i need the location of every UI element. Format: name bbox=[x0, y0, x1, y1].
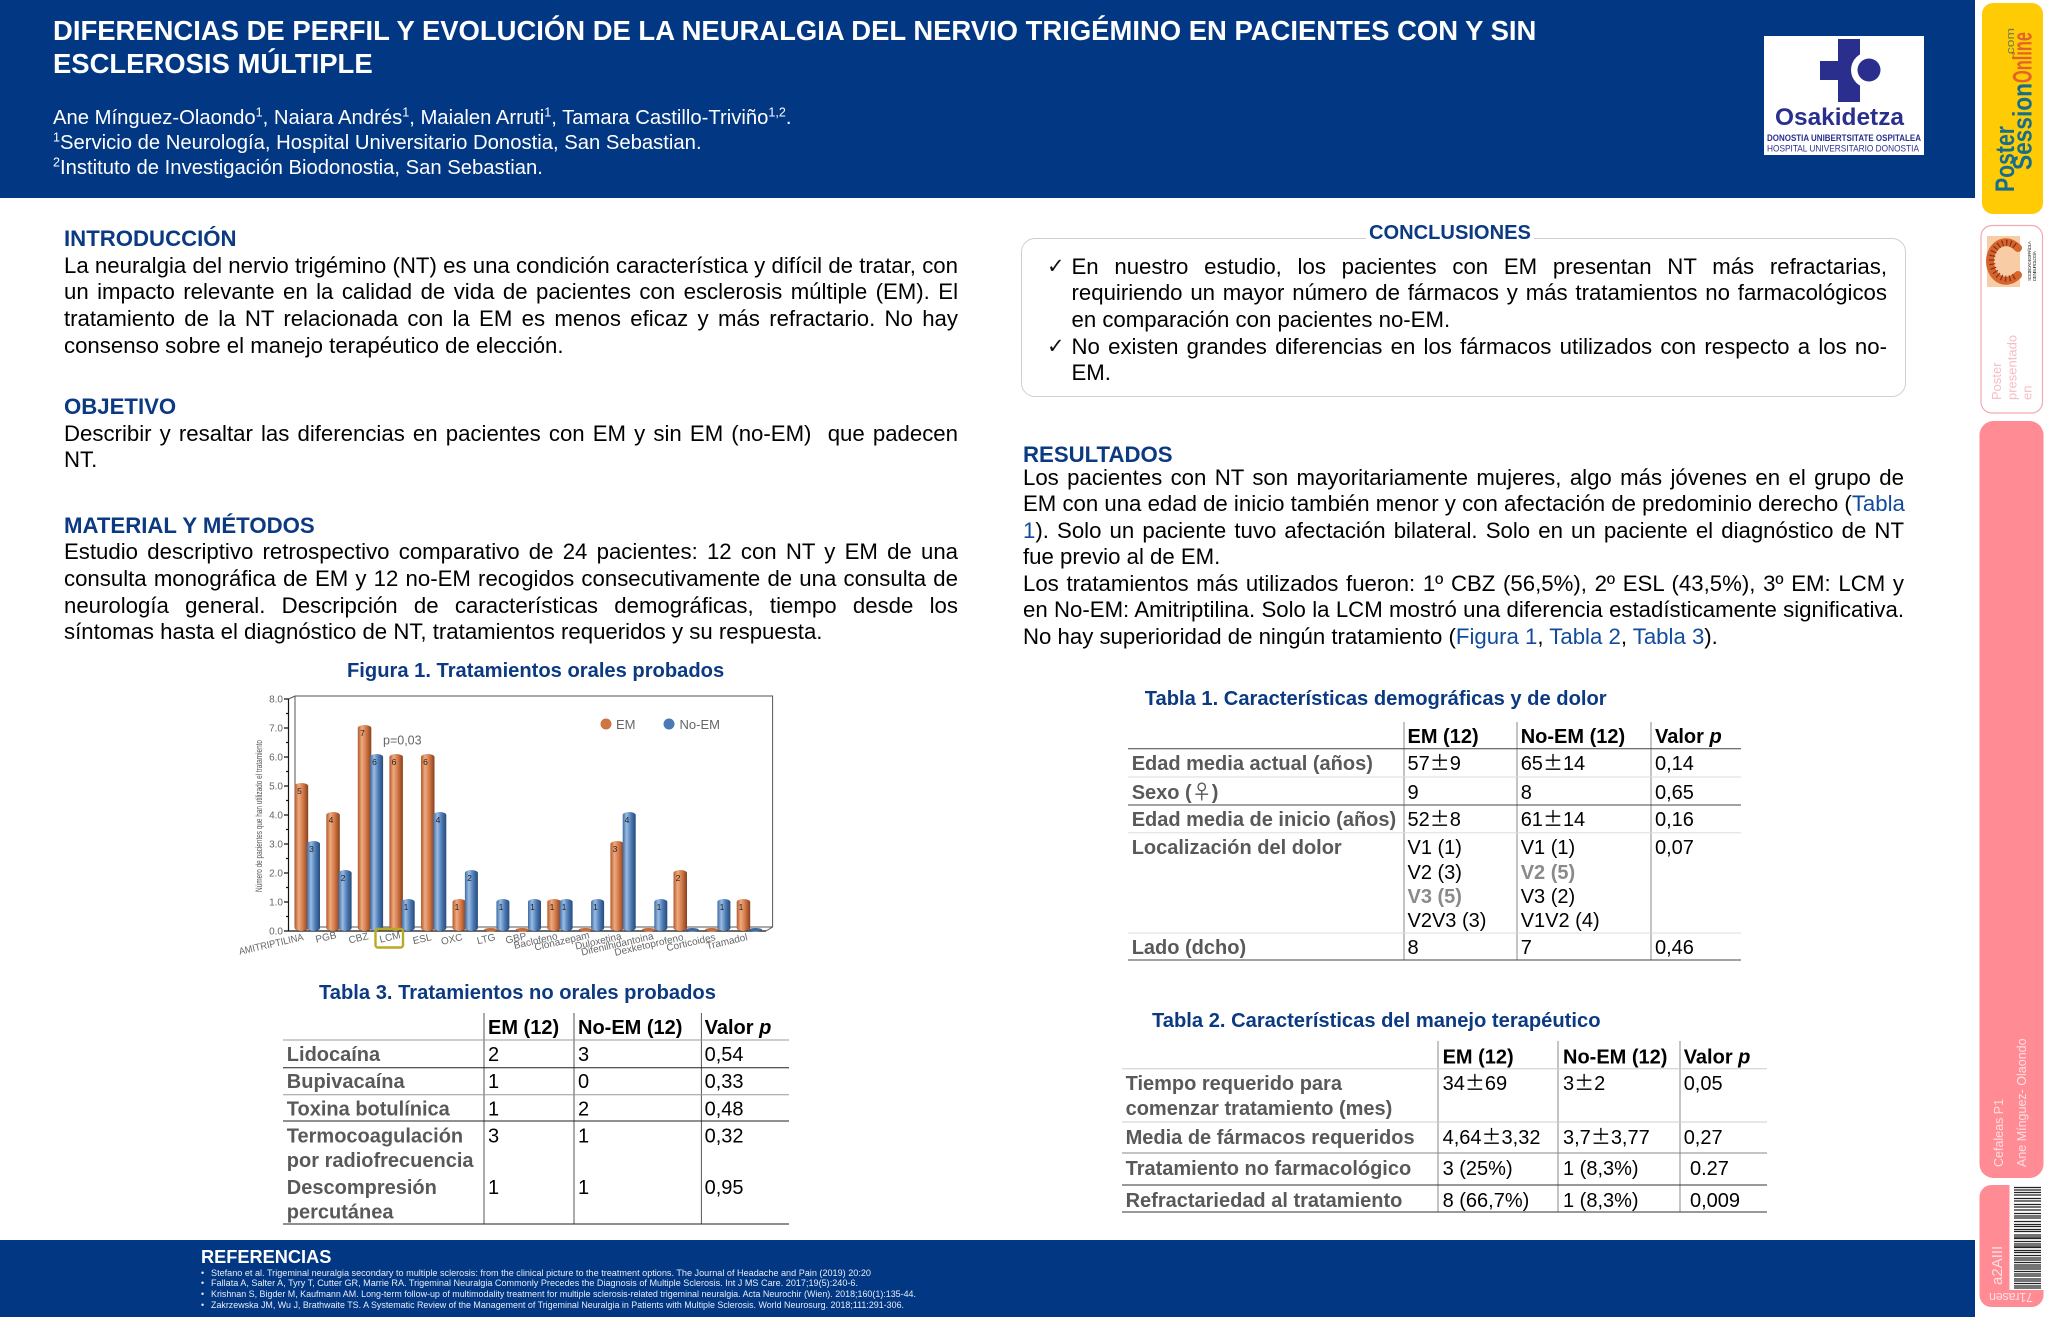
table 1: características demográficas y de dolor: V1 (1) bbox=[1521, 837, 1575, 859]
barcode bbox=[2014, 1188, 2041, 1288]
table 1: características demográficas y de dolor: Lado (dcho) bbox=[1132, 937, 1246, 959]
y axis labels: 8.0 bbox=[269, 694, 283, 706]
sidebar: session and author panel bbox=[1980, 421, 2044, 1178]
table 3: tratamientos no orales: 0,54 bbox=[705, 1044, 744, 1066]
caption: Tabla 1: Tabla 1. Características demográficas y de dolor bbox=[1145, 688, 1607, 710]
title: DIFERENCIAS DE PERFIL Y EVOLUCIÓN DE LA NEURALGIA DEL NERVIO TRIGÉMINO EN PACIENTES CON Y SIN bbox=[53, 15, 1536, 46]
sidebar: session and author panel: Cefaleas P1 bbox=[1992, 1099, 2006, 1167]
table 1: características demográficas y de dolor: Edad media actual (años) bbox=[1132, 753, 1373, 775]
table 1: características demográficas y de dolor: 0,07 bbox=[1655, 837, 1694, 859]
table 3: tratamientos no orales: 1 bbox=[578, 1126, 589, 1148]
table 2: manejo terapéutico: 3±2 bbox=[1563, 1067, 1605, 1096]
caption: Figura 1: Figura 1. Tratamientos orales probados bbox=[347, 660, 724, 682]
authors and affiliations: Ane Mínguez-Olaondo1, Naiara Andrés1, Maialen Arruti1, Tamara Castillo-Triviño1,2. bbox=[53, 105, 792, 128]
bar value labels: 1 bbox=[455, 902, 460, 912]
table 1: características demográficas y de dolor: 8 bbox=[1408, 937, 1419, 959]
table 2: manejo terapéutico: 4,64±3,32 bbox=[1443, 1121, 1540, 1150]
reference list: Fallata A, Salter A, Tyry T, Cutter GR, Marrie RA. Trigeminal Neuralgia Commonly Precedes the Diagnosis of Multiple Sclerosis. Int J MS Care. 2017;19(5):240-6. bbox=[211, 1278, 858, 1288]
x axis labels: Duloxetina bbox=[574, 931, 623, 953]
poster presented note: presentado bbox=[2005, 335, 2020, 400]
y axis title: Número de pacientes que han utilizado el tratamiento bbox=[254, 740, 265, 892]
bar value labels: 1 bbox=[720, 902, 725, 912]
table 3: tratamientos no orales: 0,32 bbox=[705, 1126, 744, 1148]
x axis labels: Tramadol bbox=[705, 932, 749, 952]
table 1: características demográficas y de dolor: 0,14 bbox=[1655, 753, 1694, 775]
emblem caption: SOCIEDAD ESPAÑOLA bbox=[2026, 240, 2033, 281]
bar value labels: 4 bbox=[436, 815, 441, 825]
heading: Material y métodos: MATERIAL Y MÉTODOS bbox=[64, 513, 315, 538]
x axis labels: GBP bbox=[505, 931, 528, 947]
table 3: tratamientos no orales: percutánea bbox=[287, 1202, 394, 1224]
table 3: tratamientos no orales: 1 bbox=[488, 1177, 499, 1199]
bar value labels: 2 bbox=[467, 873, 472, 883]
conclusions text: En nuestro estudio, los pacientes con EM presentan NT más refractarias, bbox=[1072, 254, 1887, 279]
conclusions text: en comparación con pacientes no-EM. bbox=[1072, 307, 1450, 332]
bar value labels: 2 bbox=[341, 873, 346, 883]
conclusions box outline bbox=[1021, 238, 1906, 397]
text: Resultados: 1). Solo un paciente tuvo afectación bilateral. Solo en un paciente el diagnóstico de NT bbox=[1023, 518, 1904, 543]
table 1: características demográficas y de dolor: 61±14 bbox=[1521, 803, 1585, 832]
table 2: manejo terapéutico bbox=[1122, 1041, 1767, 1212]
text: Resultados: Los pacientes con NT son mayoritariamente mujeres, algo más jóvenes en el grupo de bbox=[1023, 465, 1904, 490]
table 1: características demográficas y de dolor: 7 bbox=[1521, 937, 1532, 959]
table 2: manejo terapéutico: Valor p bbox=[1684, 1046, 1750, 1068]
header band bbox=[0, 0, 1975, 198]
sidebar: PosterSessionOnline logo: Online bbox=[2008, 32, 2038, 83]
table 2: manejo terapéutico: Refractariedad al tratamiento bbox=[1126, 1190, 1402, 1212]
y axis labels: 6.0 bbox=[269, 752, 283, 764]
table 1: características demográficas y de dolor: No-EM (12) bbox=[1521, 726, 1625, 748]
table 2: manejo terapéutico: 0,27 bbox=[1684, 1127, 1723, 1149]
table 3: tratamientos no orales: 2 bbox=[578, 1098, 589, 1120]
title bbox=[53, 15, 1536, 79]
table 1: características demográficas y de dolor: Valor p bbox=[1655, 726, 1722, 748]
conclusions text: requiriendo un mayor número de fármacos y más tratamientos no farmacológicos bbox=[1072, 280, 1887, 305]
x axis labels: Clonazepam bbox=[533, 930, 591, 954]
heading: Conclusiones: CONCLUSIONES bbox=[1369, 222, 1531, 244]
poster presented note: en bbox=[2020, 386, 2035, 400]
table 2: manejo terapéutico: Tiempo requerido para bbox=[1126, 1073, 1343, 1095]
table 2: manejo terapéutico: 3 (25%) bbox=[1443, 1158, 1513, 1180]
conclusions text: No existen grandes diferencias en los fármacos utilizados con respecto a los no- bbox=[1072, 334, 1887, 359]
table 1: características demográficas y de dolor: 8 bbox=[1521, 782, 1532, 804]
chart legend: No-EM bbox=[680, 717, 720, 732]
y axis labels: 4.0 bbox=[269, 810, 283, 822]
table 3: tratamientos no orales: 0 bbox=[578, 1071, 589, 1093]
x axis labels: Dexketoprofeno bbox=[613, 932, 685, 959]
bar value labels: 2 bbox=[676, 873, 681, 883]
y axis labels: 5.0 bbox=[269, 782, 283, 792]
sidebar: PosterSessionOnline logo: Poster bbox=[1990, 126, 2020, 192]
sidebar: PosterSessionOnline logo: Session bbox=[2008, 83, 2038, 170]
reference list bbox=[201, 1268, 916, 1310]
table 2: manejo terapéutico: 34±69 bbox=[1443, 1067, 1507, 1096]
table 2: manejo terapéutico: No-EM (12) bbox=[1563, 1046, 1667, 1068]
text: Introducción: tratamiento de la NT relacionada con la EM es menos eficaz y más refractario. No hay bbox=[64, 306, 958, 331]
table 2: manejo terapéutico: Tratamiento no farmacológico bbox=[1126, 1158, 1411, 1180]
reference list: • bbox=[201, 1268, 204, 1278]
bar value labels: 1 bbox=[657, 902, 662, 912]
text: Material y métodos: neurología general. Descripción de características demográficas, tiempo desde los bbox=[64, 593, 958, 618]
x axis labels: LCM bbox=[379, 930, 402, 946]
text: Objetivo: NT. bbox=[64, 447, 97, 472]
bars: EM and No-EM bbox=[295, 725, 762, 932]
table 2: manejo terapéutico: 0,009 bbox=[1690, 1190, 1740, 1212]
y axis labels bbox=[269, 694, 283, 938]
table 1: características demográficas y de dolor: Edad media de inicio (años) bbox=[1132, 809, 1396, 831]
bar value labels: 1 bbox=[550, 902, 555, 912]
table 1: características demográficas y de dolor: 0,65 bbox=[1655, 782, 1694, 804]
authors and affiliations bbox=[53, 105, 792, 178]
bar value labels: 1 bbox=[499, 902, 504, 912]
x axis labels: OXC bbox=[440, 932, 464, 948]
table 2: manejo terapéutico: 1 (8,3%) bbox=[1563, 1158, 1639, 1180]
text: Material y métodos: Estudio descriptivo retrospectivo comparativo de 24 pacientes: 12 con NT y EM de una bbox=[64, 539, 958, 564]
text: Introducción: La neuralgia del nervio trigémino (NT) es una condición característica y difícil de tratar, con bbox=[64, 253, 958, 278]
heading: Objetivo: OBJETIVO bbox=[64, 394, 176, 419]
table 3: tratamientos no orales: 0,95 bbox=[705, 1177, 744, 1199]
bar value labels: 6 bbox=[423, 757, 428, 767]
table 1: características demográficas y de dolor: 0,46 bbox=[1655, 937, 1694, 959]
y axis labels: 7.0 bbox=[269, 724, 283, 734]
reference list: Krishnan S, Bigder M, Kaufmann AM. Long-term follow-up of multimodality treatment for multiple sclerosis-related trigeminal neuralgia. Acta Neurochir (Wien). 2018;160(1):135-44. bbox=[211, 1289, 916, 1299]
table 1: características demográficas y de dolor: 65±14 bbox=[1521, 747, 1585, 776]
table 2: manejo terapéutico: 8 (66,7%) bbox=[1443, 1190, 1529, 1212]
table 3: tratamientos no orales: Termocoagulación bbox=[287, 1126, 463, 1148]
bar value labels: 3 bbox=[613, 844, 618, 854]
bar chart: tratamientos orales bbox=[238, 694, 773, 959]
heading: Resultados: RESULTADOS bbox=[1023, 442, 1173, 467]
y axis labels: 2.0 bbox=[269, 868, 283, 880]
text: Resultados: en No-EM: Amitriptilina. Solo la LCM mostró una diferencia estadísticamente significativa. bbox=[1023, 597, 1904, 622]
text: Resultados: fue previo al de EM. bbox=[1023, 544, 1220, 569]
logo: Osakidetza bbox=[1764, 36, 1924, 155]
table 3: tratamientos no orales: Toxina botulínica bbox=[287, 1098, 451, 1120]
x axis labels: Baclofeno bbox=[513, 931, 559, 952]
table 3: tratamientos no orales: Bupivacaína bbox=[287, 1071, 405, 1093]
text: Introducción bbox=[64, 253, 958, 358]
table 3: tratamientos no orales: 2 bbox=[488, 1044, 499, 1066]
table 3: tratamientos no orales: EM (12) bbox=[488, 1017, 559, 1039]
table 2: manejo terapéutico: EM (12) bbox=[1443, 1046, 1514, 1068]
text: Material y métodos bbox=[64, 539, 958, 644]
table 3: tratamientos no orales bbox=[283, 1013, 789, 1224]
table 1: características demográficas y de dolor: 52±8 bbox=[1408, 803, 1461, 832]
bar value labels: 4 bbox=[329, 815, 334, 825]
sidebar: poster code and barcode bbox=[1980, 1184, 2044, 1307]
bar value labels: 1 bbox=[593, 902, 598, 912]
conclusions text bbox=[1072, 254, 1887, 385]
caption: Tabla 2: Tabla 2. Características del manejo terapéutico bbox=[1152, 1010, 1600, 1032]
table 3: tratamientos no orales: 0,48 bbox=[705, 1098, 744, 1120]
table 3: tratamientos no orales: 0,33 bbox=[705, 1071, 744, 1093]
sidebar: poster code and barcode: a2AIII bbox=[1989, 1246, 2006, 1285]
title: ESCLEROSIS MÚLTIPLE bbox=[53, 48, 373, 79]
reference list: Stefano et al. Trigeminal neuralgia secondary to multiple sclerosis: from the clinical picture to the treatment options. The Journal of Headache and Pain (2019) 20:20 bbox=[211, 1268, 871, 1278]
table 3: tratamientos no orales: 1 bbox=[488, 1071, 499, 1093]
y axis labels: 1.0 bbox=[269, 898, 283, 908]
check marks: ✓ bbox=[1047, 334, 1065, 358]
text: Introducción: un impacto relevante en la calidad de vida de pacientes con esclerosis múltiple (EM). El bbox=[64, 279, 958, 304]
LCM highlight box bbox=[376, 929, 403, 948]
bar value labels: 1 bbox=[562, 902, 567, 912]
footer band: referencias bbox=[0, 1240, 1975, 1317]
table 3: tratamientos no orales: 1 bbox=[578, 1177, 589, 1199]
text: Material y métodos: síntomas hasta el diagnóstico de NT, tratamientos requeridos y su respuesta. bbox=[64, 619, 822, 644]
chart legend: EM bbox=[616, 717, 636, 732]
table 1: características demográficas y de dolor: V3 (5) bbox=[1408, 886, 1462, 908]
text: Objetivo: Describir y resaltar las diferencias en pacientes con EM y sin EM (no-EM) que padecen bbox=[64, 421, 958, 446]
logo: Osakidetza: Osakidetza bbox=[1775, 104, 1905, 131]
table 1: características demográficas y de dolor: V3 (2) bbox=[1521, 886, 1575, 908]
table 2: manejo terapéutico: 1 (8,3%) bbox=[1563, 1190, 1639, 1212]
text: Introducción: consenso sobre el manejo terapéutico de elección. bbox=[64, 333, 564, 358]
table 1: características demográficas y de dolor: V1 (1) bbox=[1408, 837, 1462, 859]
conclusions text: EM. bbox=[1072, 360, 1111, 385]
table 1: características demográficas y de dolor bbox=[1128, 722, 1741, 960]
x axis labels: Corticoides bbox=[665, 932, 717, 954]
bar value labels: 6 bbox=[392, 757, 397, 767]
x axis labels: Difenilhidantoina bbox=[580, 931, 655, 959]
text: Material y métodos: consulta monográfica de EM y 12 no-EM recogidos consecutivamente de una consulta de bbox=[64, 566, 958, 591]
x axis labels: CBZ bbox=[348, 931, 370, 946]
bar value labels: 1 bbox=[739, 902, 744, 912]
table 1: características demográficas y de dolor: Localización del dolor bbox=[1132, 837, 1342, 859]
x axis labels: LTG bbox=[476, 932, 497, 947]
sidebar: poster code and barcode: 71rasen bbox=[1989, 1290, 2033, 1304]
x axis labels: PGB bbox=[315, 930, 338, 946]
text: Resultados: No hay superioridad de ningún tratamiento (Figura 1, Tabla 2, Tabla 3). bbox=[1023, 624, 1718, 649]
sidebar: congress panel bbox=[1981, 226, 2042, 413]
sidebar: session and author panel: Ane Mínguez- Olaondo bbox=[2015, 1038, 2029, 1167]
table 1: características demográficas y de dolor: V2 (5) bbox=[1521, 862, 1575, 884]
text: Objetivo bbox=[64, 421, 958, 472]
table 3: tratamientos no orales: Valor p bbox=[705, 1017, 771, 1039]
poster presented note: Poster bbox=[1989, 362, 2004, 400]
bar value labels bbox=[297, 728, 744, 912]
bar value labels: 6 bbox=[372, 757, 377, 767]
text: Resultados bbox=[1023, 465, 1905, 649]
text: Resultados: EM con una edad de inicio también menor y con afectación de predominio derecho (Tabla bbox=[1023, 491, 1905, 516]
bar value labels: 5 bbox=[297, 786, 302, 796]
table 1: características demográficas y de dolor: V1V2 (4) bbox=[1521, 910, 1600, 932]
bar value labels: 1 bbox=[530, 902, 535, 912]
table 1: características demográficas y de dolor: 0,16 bbox=[1655, 809, 1694, 831]
bar value labels: 3 bbox=[309, 844, 314, 854]
poster presented note bbox=[1989, 335, 2035, 400]
bar value labels: 1 bbox=[404, 902, 409, 912]
heading: Introducción: INTRODUCCIÓN bbox=[64, 226, 237, 251]
reference list: • bbox=[201, 1278, 204, 1288]
table 1: características demográficas y de dolor: Sexo (♀) bbox=[1132, 776, 1218, 805]
sidebar: PosterSessionOnline logo: .com bbox=[2005, 28, 2017, 58]
table 1: características demográficas y de dolor: 9 bbox=[1408, 782, 1419, 804]
authors and affiliations: 1Servicio de Neurología, Hospital Universitario Donostia, San Sebastian. bbox=[53, 130, 702, 154]
x axis labels bbox=[238, 930, 749, 959]
sidebar: PosterSessionOnline logo bbox=[1982, 3, 2043, 214]
table 2: manejo terapéutico: 0,05 bbox=[1684, 1073, 1723, 1095]
table 3: tratamientos no orales: 3 bbox=[488, 1126, 499, 1148]
reference list: Zakrzewska JM, Wu J, Brathwaite TS. A Systematic Review of the Management of Trigeminal Neuralgia in Patients with Multiple Sclerosis. World Neurosurg. 2018;111:291-306. bbox=[211, 1300, 904, 1310]
table 3: tratamientos no orales: Lidocaína bbox=[287, 1044, 381, 1066]
table 3: tratamientos no orales: por radiofrecuencia bbox=[287, 1150, 474, 1172]
bar value labels: 4 bbox=[625, 815, 630, 825]
x axis labels: AMITRIPTILINA bbox=[238, 932, 305, 958]
table 2: manejo terapéutico: 3,7±3,77 bbox=[1563, 1121, 1650, 1150]
table 3: tratamientos no orales: No-EM (12) bbox=[578, 1017, 682, 1039]
table 2: manejo terapéutico: comenzar tratamiento (mes) bbox=[1126, 1098, 1392, 1120]
authors and affiliations: 2Instituto de Investigación Biodonostia, San Sebastian. bbox=[53, 155, 543, 178]
x axis labels: ESL bbox=[412, 932, 433, 947]
table 1: características demográficas y de dolor: 57±9 bbox=[1408, 747, 1461, 776]
table 2: manejo terapéutico: Media de fármacos requeridos bbox=[1126, 1127, 1415, 1149]
chart legend bbox=[600, 717, 720, 732]
heading: Referencias: REFERENCIAS bbox=[201, 1247, 331, 1267]
panel: conclusiones bbox=[1021, 222, 1906, 397]
caption: Tabla 3: Tabla 3. Tratamientos no orales probados bbox=[319, 982, 716, 1004]
bar value labels: 7 bbox=[360, 728, 365, 738]
text: Resultados: Los tratamientos más utilizados fueron: 1º CBZ (56,5%), 2º ESL (43,5%), 3º EM: LCM y bbox=[1023, 571, 1904, 596]
table 3: tratamientos no orales: 1 bbox=[488, 1098, 499, 1120]
p value annotation: p=0,03 bbox=[383, 734, 422, 748]
reference list: • bbox=[201, 1300, 204, 1310]
check marks bbox=[1047, 254, 1065, 358]
reference list: • bbox=[201, 1289, 204, 1299]
icon: brain emblem bbox=[1987, 236, 2020, 287]
table 1: características demográficas y de dolor: EM (12) bbox=[1408, 726, 1479, 748]
y axis labels: 0.0 bbox=[269, 926, 283, 938]
table 1: características demográficas y de dolor: V2V3 (3) bbox=[1408, 910, 1486, 932]
sidebar: congress panel: DE NEUROLOGÍA bbox=[2031, 250, 2038, 281]
table 3: tratamientos no orales: Descompresión bbox=[287, 1177, 437, 1199]
table 1: características demográficas y de dolor: V2 (3) bbox=[1408, 862, 1462, 884]
table 2: manejo terapéutico: 0.27 bbox=[1690, 1158, 1729, 1180]
y axis labels: 3.0 bbox=[269, 840, 283, 850]
table 3: tratamientos no orales: 3 bbox=[578, 1044, 589, 1066]
check marks: ✓ bbox=[1047, 254, 1065, 278]
